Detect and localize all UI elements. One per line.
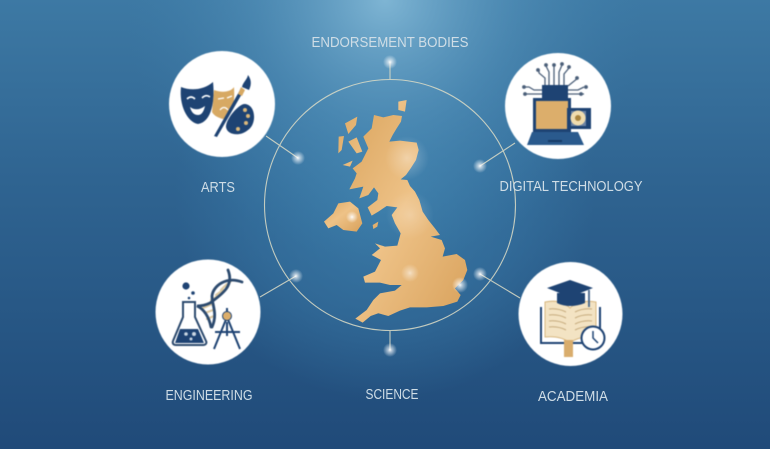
label: arts: ARTS (201, 180, 235, 196)
bubbles (182, 282, 195, 299)
flask (173, 302, 206, 345)
drafting compass (214, 308, 240, 349)
circuit traces (524, 65, 584, 94)
icon: academia (518, 262, 622, 366)
icon: digital technology (505, 53, 611, 159)
laptop (533, 98, 571, 132)
map of the United Kingdom (324, 100, 467, 323)
connector nodes (289, 55, 487, 357)
Scottish islands (338, 100, 407, 229)
graduation cap (557, 293, 585, 306)
DNA (197, 270, 242, 327)
chip (542, 85, 568, 99)
gear panel (567, 108, 591, 129)
label: academia: ACADEMIA (538, 389, 608, 405)
brush (214, 90, 243, 137)
central ring with connectors (260, 62, 520, 350)
label: engineering: ENGINEERING (166, 388, 252, 404)
Northern Ireland (324, 202, 362, 232)
navy comedy mask (181, 82, 214, 124)
map glints (346, 136, 468, 293)
label: endorsement bodies: ENDORSEMENT BODIES (312, 35, 468, 51)
label: digital technology: DIGITAL TECHNOLOGY (500, 179, 643, 195)
icon: arts (169, 51, 275, 157)
palette (226, 104, 254, 134)
label: science: SCIENCE (366, 387, 419, 403)
gold tragedy mask (212, 87, 234, 119)
bookmark (564, 340, 573, 357)
book (541, 307, 600, 343)
clock (582, 326, 604, 350)
icon: engineering (156, 260, 260, 364)
Great Britain (349, 115, 467, 323)
